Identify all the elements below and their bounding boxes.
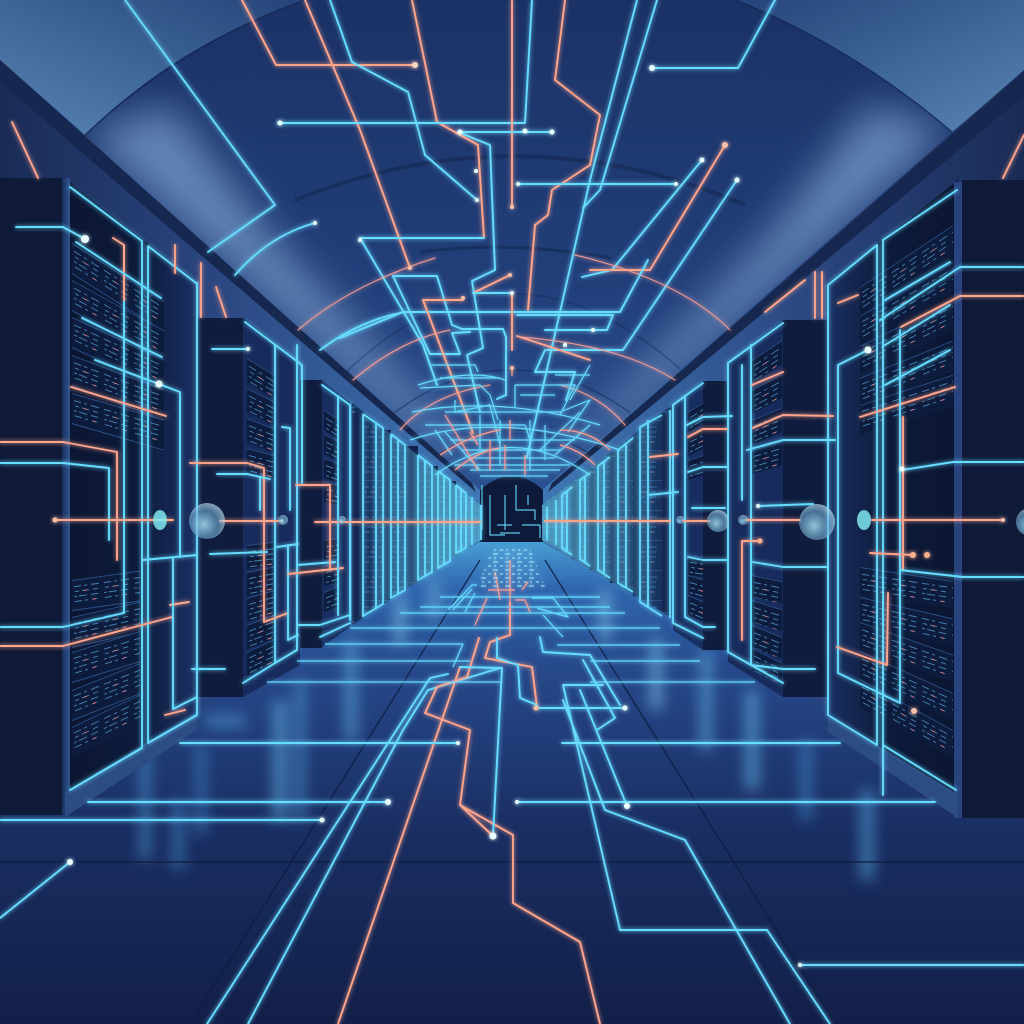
right rack 3: [673, 381, 728, 650]
left wall cornice: [0, 60, 476, 492]
far left rack faces: [352, 413, 456, 618]
end wall circuit: [482, 485, 540, 538]
ceiling circuit traces: [12, 0, 1024, 457]
rack 1: [0, 178, 197, 817]
ceiling ribs: [85, 0, 952, 460]
far end wall: [480, 476, 543, 542]
central ceiling web: [410, 365, 620, 476]
left rack circuit traces: [0, 187, 480, 790]
far left racks: [352, 403, 481, 625]
right wall: [542, 70, 1024, 820]
left cove glow: [85, 105, 470, 480]
vaulted ceiling: [0, 0, 1024, 520]
right wall cornice: [548, 72, 1024, 492]
right cove glow: [555, 105, 950, 480]
floor reflections: [140, 580, 874, 880]
rack 3: [300, 380, 350, 648]
top right corner panel: [735, 0, 1024, 132]
floor: [0, 540, 1024, 1024]
right rack row: [542, 180, 1024, 818]
right rack 2: [728, 320, 828, 697]
glass orbs: [153, 503, 1024, 540]
right rack 1: [828, 180, 1024, 818]
floor seams: [0, 560, 1024, 1024]
distant floor circuit cluster: [478, 548, 545, 587]
top left corner panel: [0, 0, 305, 135]
left rack row: [0, 178, 481, 817]
far right rack faces: [572, 415, 672, 612]
rack 2: [197, 318, 300, 697]
right rack circuit traces: [545, 190, 1024, 795]
far right racks: [542, 405, 672, 618]
left wall: [0, 60, 480, 820]
floor circuit traces: [0, 548, 1024, 1024]
